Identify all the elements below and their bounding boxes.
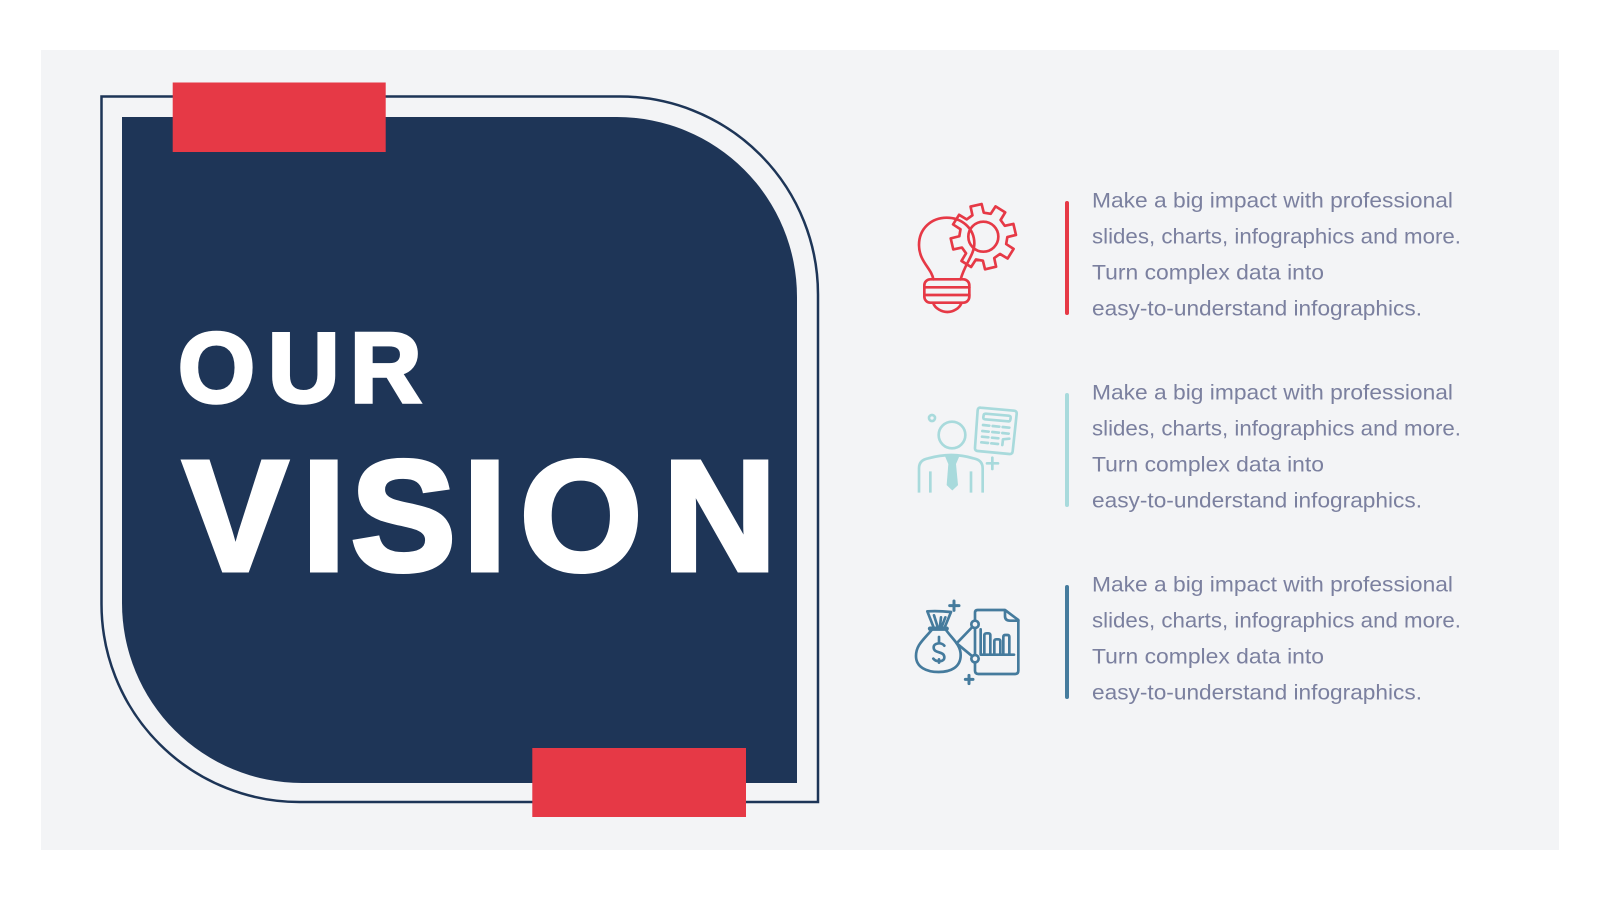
icon: money bag and report: [916, 601, 1018, 684]
text block 3: Make a big impact with professional: [1092, 573, 1453, 596]
text block 1: Make a big impact with professional: [1092, 189, 1453, 212]
text block 1: easy-to-understand infographics.: [1092, 297, 1422, 320]
text block 2: [1092, 381, 1461, 512]
text block 1: [1092, 189, 1461, 320]
card fill: [122, 117, 797, 783]
card outline: [102, 96, 818, 802]
heading: vision: VISION: [183, 429, 776, 604]
item 3: finance: [916, 573, 1461, 704]
accent: top red block: [173, 82, 386, 152]
accent: bottom red block: [532, 748, 746, 817]
panel: vision card: [102, 82, 818, 817]
icon: light bulb and gear: [919, 204, 1016, 312]
divider bar: blue: [1065, 585, 1069, 699]
text block 1: Turn complex data into: [1092, 261, 1324, 284]
text block 2: easy-to-understand infographics.: [1092, 489, 1422, 512]
divider bar: teal: [1065, 393, 1069, 507]
text block 3: [1092, 573, 1461, 704]
icon: businessman and calculator: [919, 408, 1017, 493]
text block 3: easy-to-understand infographics.: [1092, 681, 1422, 704]
item 2: business planning: [919, 381, 1461, 512]
text block 2: Make a big impact with professional: [1092, 381, 1453, 404]
text block 1: slides, charts, infographics and more.: [1092, 225, 1461, 248]
heading: our: OUR: [178, 312, 422, 423]
divider bar: red: [1065, 201, 1069, 315]
text block 3: Turn complex data into: [1092, 645, 1324, 668]
item 1: innovation: [919, 189, 1461, 320]
text block 2: Turn complex data into: [1092, 453, 1324, 476]
text block 2: slides, charts, infographics and more.: [1092, 417, 1461, 440]
text block 3: slides, charts, infographics and more.: [1092, 609, 1461, 632]
